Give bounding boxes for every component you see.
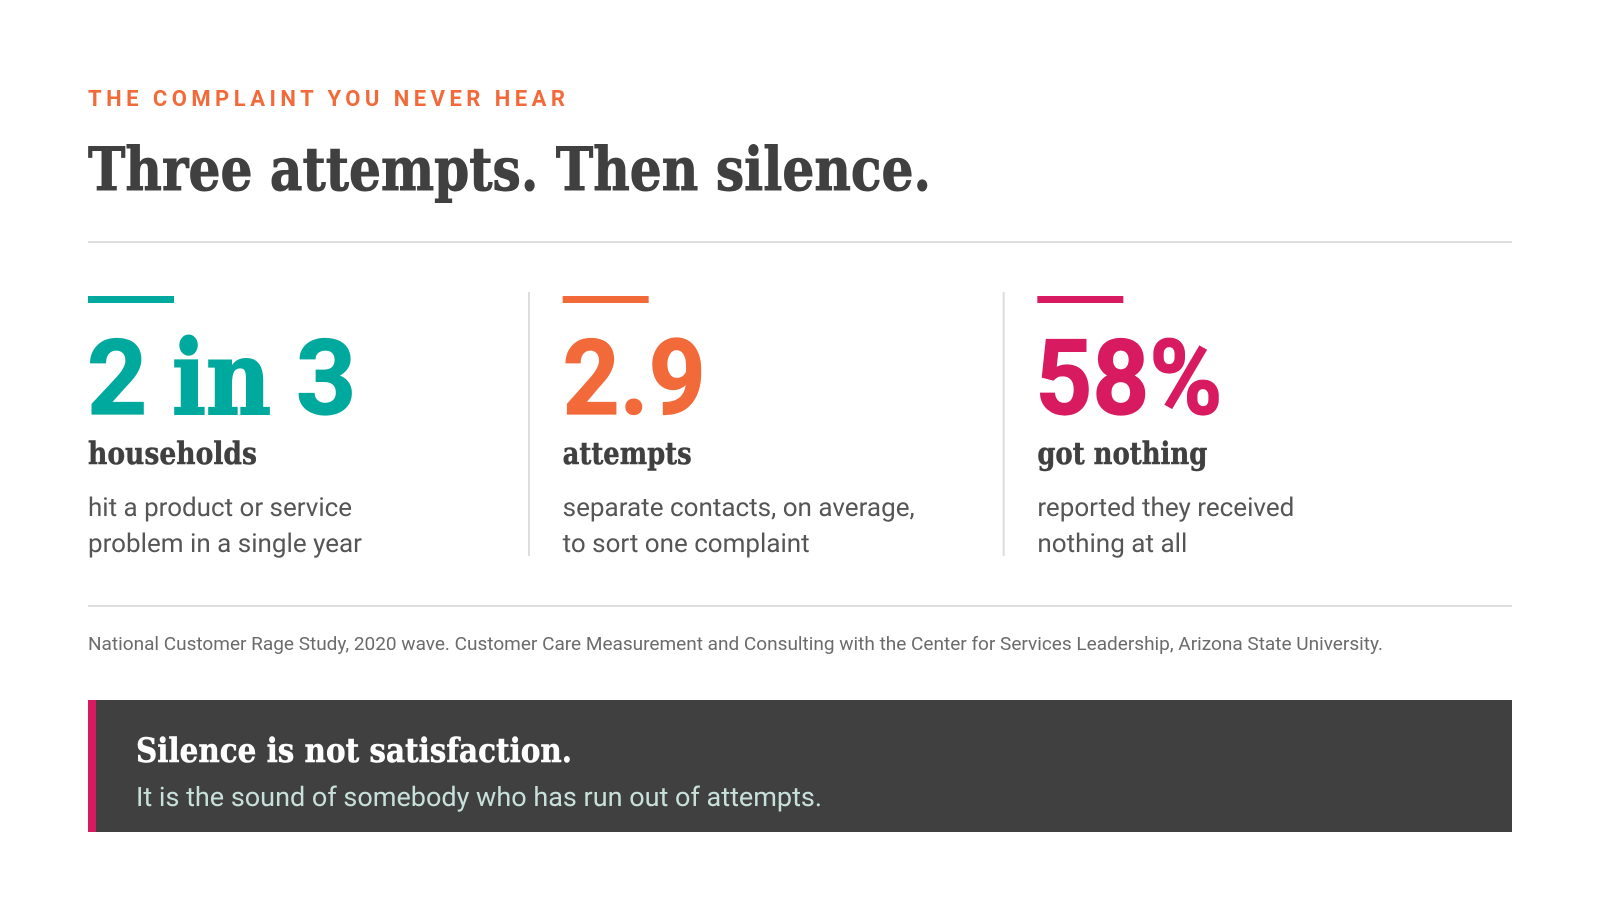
description: to sort one complaint — [563, 529, 810, 559]
description: reported they received — [1037, 493, 1294, 523]
stat: 2 in 3: 3 — [296, 317, 356, 440]
description: problem in a single year — [88, 529, 362, 559]
panel: 58% got nothing — [1036, 296, 1294, 559]
accent bar: pink — [1037, 296, 1123, 303]
stat: 2 in 3: in — [172, 318, 271, 439]
stat: 58%: 58% — [1036, 317, 1222, 440]
callout banner — [88, 700, 1512, 832]
source note: National Customer Rage Study, 2020 wave. Customer Care Measurement and Consulting with the Center for Services Leadership, Arizona State University. — [88, 633, 1383, 655]
description — [1037, 493, 1294, 559]
panel: 2 in 3 households — [87, 296, 362, 559]
description: nothing at all — [1037, 529, 1187, 559]
label: households: households — [88, 436, 257, 472]
eyebrow: THE COMPLAINT YOU NEVER HEAR — [88, 87, 569, 112]
label: attempts: attempts — [563, 436, 692, 472]
title: Three attempts. Then silence. — [88, 135, 931, 205]
stat: 2 in 3 — [87, 317, 356, 440]
panel: 2.9 attempts — [563, 296, 915, 559]
description: separate contacts, on average, — [563, 493, 915, 523]
description: hit a product or service — [88, 493, 352, 523]
accent bar: teal — [88, 296, 174, 303]
banner subtext: It is the sound of somebody who has run out of attempts. — [136, 782, 822, 813]
banner accent — [88, 700, 96, 832]
stat: 2.9: 2.9 — [563, 317, 706, 440]
description — [88, 493, 362, 559]
stat: 2 in 3: 2 — [87, 317, 147, 440]
description — [563, 493, 915, 559]
label: got nothing: got nothing — [1037, 436, 1207, 472]
banner background — [88, 700, 1512, 832]
banner heading: Silence is not satisfaction. — [136, 731, 572, 770]
accent bar: orange — [563, 296, 649, 303]
